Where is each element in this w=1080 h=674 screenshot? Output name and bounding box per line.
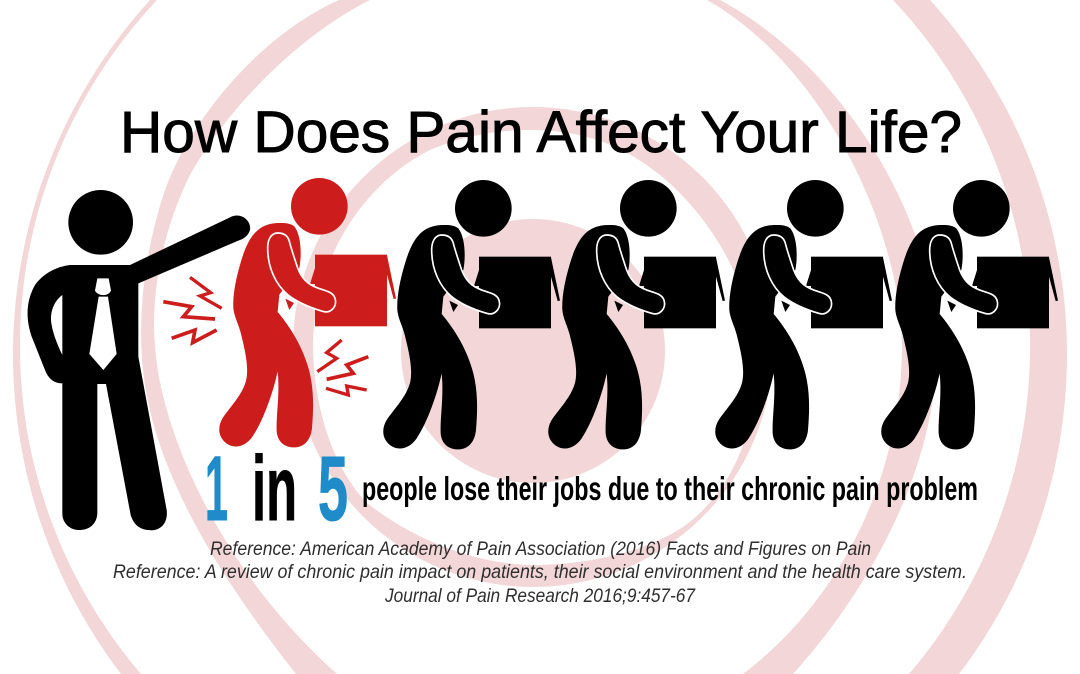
- references: Reference: A review of chronic pain impact on patients, their social environment and the health care system.: [113, 562, 967, 583]
- figure: black worker 4: [881, 180, 1058, 449]
- references: [113, 539, 967, 607]
- title: How Does Pain Affect Your Life?: [120, 100, 962, 165]
- references: Journal of Pain Research 2016;9:457-67: [384, 586, 696, 607]
- figure: black worker 2: [548, 180, 725, 449]
- figure: black worker 3: [715, 180, 892, 449]
- figure: black worker 1: [383, 180, 560, 449]
- references: Reference: American Academy of Pain Association (2016) Facts and Figures on Pain: [210, 539, 871, 560]
- manager tie: [89, 278, 117, 370]
- pain bolts: red lightning marks: [163, 277, 368, 395]
- statistic: 1 in 5: 1: [205, 438, 228, 540]
- gap between manager arm and torso: [51, 295, 62, 355]
- figure: manager pointing: [28, 190, 250, 530]
- figure: red worker in pain: [219, 178, 396, 447]
- statistic: 1 in 5: [205, 438, 348, 540]
- statistic: 1 in 5: 5: [318, 438, 348, 540]
- statistic: 1 in 5: in: [252, 438, 297, 540]
